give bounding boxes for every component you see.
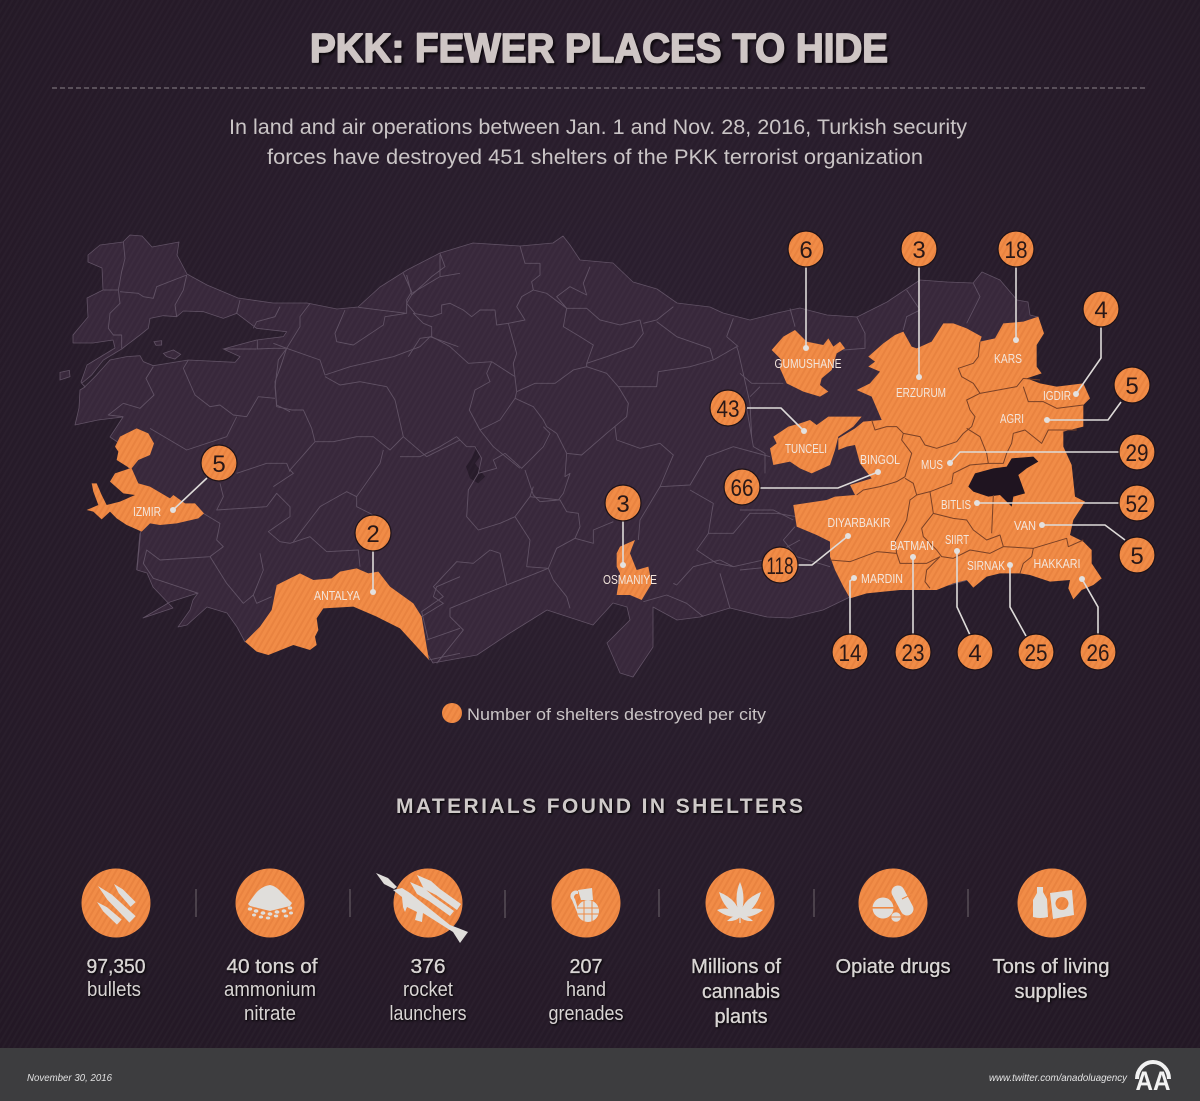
item: cannabis plants: Millions of: [691, 956, 781, 978]
callout: Osmaniye 3: [603, 485, 657, 587]
callout: Bitlis 52: [941, 485, 1155, 521]
intro text: forces have destroyed 451 shelters of the PKK terrorist organization: [267, 146, 923, 169]
section heading: materials: MATERIALS FOUND IN SHELTERS: [396, 795, 803, 818]
callout: Bingol 66: 66: [730, 475, 754, 502]
callout: Bitlis 52: BITLIS: [941, 497, 971, 512]
item: ammonium nitrate: 40 tons of: [226, 956, 318, 978]
item: living supplies: Tons of living: [992, 956, 1110, 978]
callout: Igdir 4: [1043, 291, 1119, 403]
callout: Tunceli 43: 43: [716, 396, 740, 423]
intro text: In land and air operations between Jan. 1 and Nov. 28, 2016, Turkish security: [229, 116, 968, 139]
item: bullets: [82, 868, 150, 1001]
item: rocket launchers: [376, 868, 468, 1025]
item: opiate drugs: Opiate drugs: [836, 956, 950, 978]
callout: Bingol 66: [724, 452, 900, 505]
item: hand grenades: [548, 868, 624, 1025]
callout: Mardin 14: MARDIN: [861, 571, 903, 586]
province borders west: [137, 255, 460, 660]
callout: Bingol 66: BINGOL: [860, 452, 900, 467]
twitter address: www.twitter.com/anadoluagency: [989, 1072, 1128, 1084]
icon: rocket launcher: [376, 873, 468, 943]
callout: Batman 23: [890, 538, 934, 670]
callout: Hakkari 26: HAKKARI: [1034, 556, 1080, 571]
callout: Gumushane 6: GUMUSHANE: [774, 356, 842, 371]
highlighted eastern provinces: [793, 317, 1102, 599]
callout: Sirnak 25: SIRNAK: [967, 558, 1005, 573]
callout: Siirt 4: 4: [968, 640, 982, 667]
item: living supplies: [992, 868, 1110, 1003]
icon: pills: [872, 892, 912, 922]
icon: grenade: [570, 888, 599, 922]
footer: [0, 1048, 1200, 1101]
highlighted province: Gumushane: [772, 330, 845, 397]
item: bullets: 97,350: [86, 956, 146, 978]
callout: Mus 29: 29: [1126, 440, 1148, 467]
highlighted province: Izmir: [87, 428, 204, 532]
map legend: Number of shelters destroyed per city: [467, 705, 767, 724]
callout: Mardin 14: [832, 571, 903, 670]
item: opiate drugs: [836, 868, 950, 978]
item: rocket launchers: rocket: [403, 979, 453, 1001]
sea of Marmara: [60, 311, 287, 387]
logo: AA: AA: [1136, 1066, 1170, 1096]
item: ammonium nitrate: nitrate: [244, 1003, 296, 1025]
callout: Sirnak 25: [967, 558, 1054, 670]
title: PKK: FEWER PLACES TO HIDE: [310, 25, 888, 71]
callout: Antalya 2: ANTALYA: [314, 588, 360, 603]
callout: Mus 29: MUS: [921, 457, 943, 472]
item: cannabis plants: [691, 868, 781, 1028]
item: cannabis plants: cannabis: [702, 981, 780, 1003]
callout: Siirt 4: SIIRT: [945, 532, 969, 547]
Lake Tuz: [466, 447, 485, 483]
callout: Izmir 5: [133, 445, 237, 519]
callout: Igdir 4: 4: [1094, 297, 1108, 324]
callout: Erzurum 3: 3: [912, 237, 926, 264]
highlighted province: Antalya: [245, 568, 429, 660]
callout: Mardin 14: 14: [838, 640, 862, 667]
callout: Mus 29: [921, 434, 1155, 472]
item: ammonium nitrate: [224, 868, 318, 1025]
callout: Agri 5: 5: [1125, 373, 1139, 400]
province borders centre: [400, 246, 800, 663]
item: rocket launchers: launchers: [390, 1003, 466, 1025]
item: rocket launchers: 376: [410, 956, 446, 978]
callout: Erzurum 3: ERZURUM: [896, 385, 946, 400]
callout: Gumushane 6: 6: [799, 237, 813, 264]
callout: Batman 23: BATMAN: [890, 538, 934, 553]
highlighted province: Osmaniye: [617, 540, 652, 600]
callout: Kars 18: [994, 231, 1034, 366]
icon: bottle and bag: [1033, 887, 1074, 919]
callout: Siirt 4: [945, 532, 993, 670]
callout: Antalya 2: 2: [366, 521, 380, 548]
icon: bullets: [95, 882, 136, 925]
callout: Kars 18: KARS: [994, 351, 1022, 366]
item: bullets: bullets: [87, 979, 141, 1001]
callout: Agri 5: AGRI: [1000, 411, 1024, 426]
item: ammonium nitrate: ammonium: [224, 979, 316, 1001]
callout: Van 5: VAN: [1014, 518, 1036, 533]
callout: Van 5: 5: [1130, 543, 1144, 570]
callout: Van 5: [1014, 518, 1155, 573]
callout: Diyarbakir 118: DIYARBAKIR: [828, 515, 890, 530]
callout: Diyarbakir 118: [762, 515, 890, 583]
highlighted province: Tunceli: [770, 417, 862, 473]
province borders north-east: [740, 283, 980, 570]
callout: Erzurum 3: [896, 231, 946, 400]
callout: Izmir 5: 5: [212, 451, 226, 478]
callout: Kars 18: 18: [1004, 237, 1028, 264]
Lake Van: [968, 457, 1038, 507]
icon: pile: [248, 885, 293, 920]
intro text: [229, 116, 968, 169]
item: living supplies: supplies: [1014, 981, 1088, 1003]
callout: Tunceli 43: [710, 390, 827, 456]
date: November 30, 2016: [27, 1073, 112, 1084]
callout: Osmaniye 3: OSMANIYE: [603, 572, 657, 587]
icon: cannabis leaf: [717, 882, 763, 923]
callout: Agri 5: [1000, 367, 1150, 426]
callout: Osmaniye 3: 3: [616, 491, 630, 518]
item: hand grenades: hand: [566, 979, 606, 1001]
land mass: [73, 235, 1050, 677]
province borders north-west: [103, 242, 290, 417]
item: hand grenades: 207: [570, 956, 602, 978]
callout: Antalya 2: [314, 515, 391, 603]
callout: Hakkari 26: 26: [1086, 640, 1110, 667]
callout: Batman 23: 23: [902, 640, 924, 667]
callout: Hakkari 26: [1034, 556, 1116, 670]
item: cannabis plants: plants: [714, 1006, 768, 1028]
callout: Gumushane 6: [774, 231, 842, 371]
callout: Izmir 5: IZMIR: [133, 504, 161, 519]
callout: Diyarbakir 118: 118: [766, 553, 794, 580]
item: hand grenades: grenades: [548, 1003, 624, 1025]
callout: Igdir 4: IGDIR: [1043, 388, 1071, 403]
callout: Tunceli 43: TUNCELI: [785, 441, 827, 456]
callout: Bitlis 52: 52: [1126, 491, 1148, 518]
callout: Sirnak 25: 25: [1024, 640, 1048, 667]
